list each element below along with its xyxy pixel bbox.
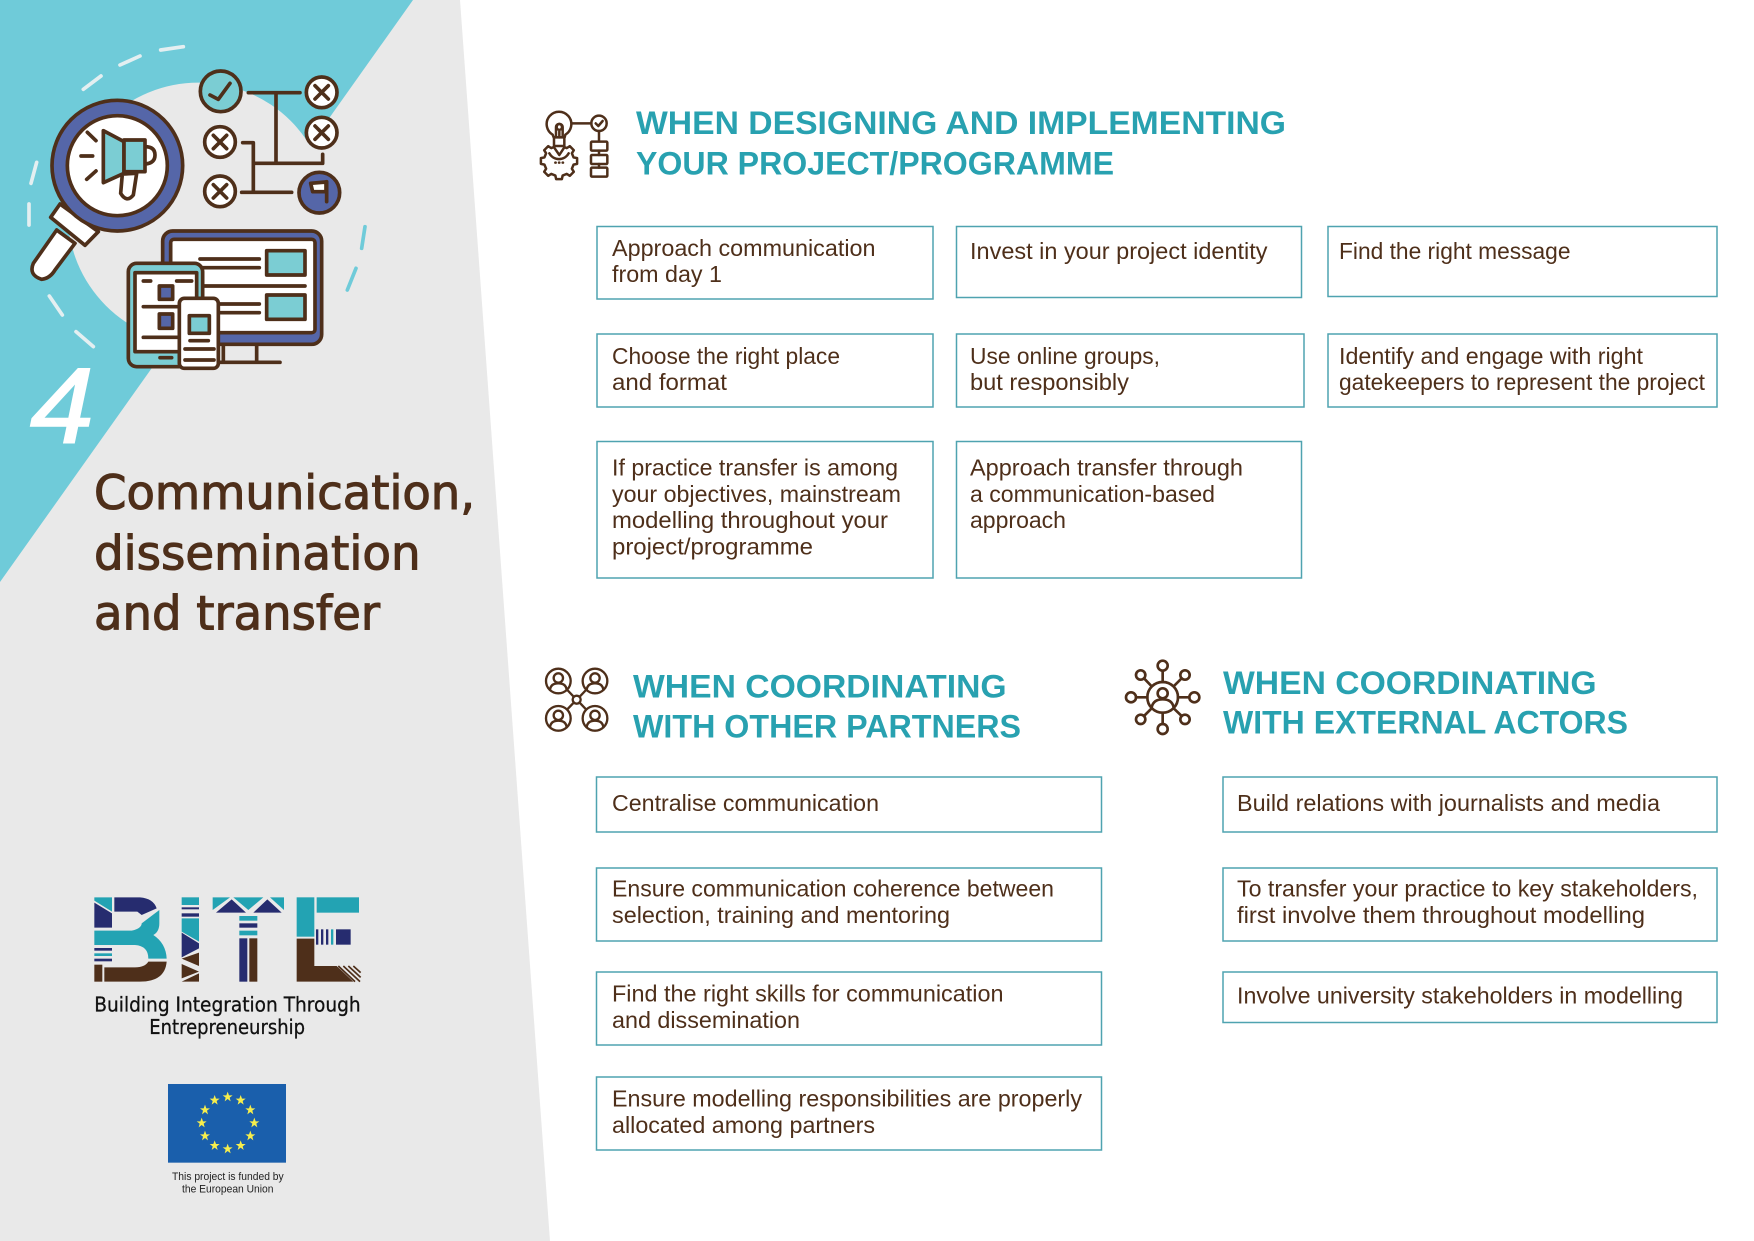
card: skills: Find the right skills for communication <box>612 980 1004 1006</box>
title: and transfer <box>94 586 381 642</box>
card: place and format: and format <box>612 369 728 395</box>
BITE tagline: Entrepreneurship <box>149 1015 305 1039</box>
card: journalists: Build relations with journalists and media <box>1237 790 1660 816</box>
card: practice transfer: project/programme <box>612 534 813 560</box>
heading: partners: WHEN COORDINATING <box>633 668 1007 704</box>
card: communication-based transfer: approach <box>970 507 1066 533</box>
card: practice transfer <box>597 442 933 578</box>
card: gatekeepers: Identify and engage with right <box>1339 343 1644 369</box>
BITE tagline <box>94 993 361 1039</box>
teal triangle <box>0 0 413 582</box>
EU funding note <box>172 1171 284 1196</box>
card: stakeholders <box>1223 868 1717 941</box>
title <box>94 466 475 642</box>
card: practice transfer: your objectives, mainstream <box>612 481 901 507</box>
card: right message: Find the right message <box>1339 238 1570 264</box>
title: Communication, <box>94 466 475 521</box>
heading: external actors: WHEN COORDINATING <box>1223 665 1597 701</box>
title: dissemination <box>94 526 421 582</box>
icon: design section <box>541 112 607 179</box>
card: responsibilities <box>596 1077 1102 1150</box>
heading: designing: WHEN DESIGNING AND IMPLEMENTING <box>636 105 1286 141</box>
card: centralise: Centralise communication <box>612 790 879 816</box>
card: stakeholders: To transfer your practice to key stakeholders, <box>1237 876 1698 902</box>
card: coherence: selection, training and mentoring <box>612 902 950 928</box>
EU funding note: This project is funded by <box>172 1171 284 1183</box>
icon: partners <box>546 669 607 731</box>
card: stakeholders: first involve them throughout modelling <box>1237 902 1645 928</box>
card: online groups: Use online groups, <box>970 343 1160 369</box>
illustration: communication icons <box>29 47 365 368</box>
heading: external actors: WITH EXTERNAL ACTORS <box>1223 704 1628 740</box>
heading: partners: WITH OTHER PARTNERS <box>633 708 1021 744</box>
card: university <box>1223 972 1717 1022</box>
card: project identity: Invest in your project identity <box>970 238 1268 264</box>
card: communication-based transfer <box>956 442 1302 578</box>
card: approach communication <box>597 226 933 299</box>
card: approach communication: from day 1 <box>612 261 722 287</box>
card: journalists <box>1223 777 1717 832</box>
card: place and format: Choose the right place <box>612 343 840 369</box>
card: university: Involve university stakeholders in modelling <box>1237 982 1683 1008</box>
left gray panel <box>0 0 550 1241</box>
card: coherence: Ensure communication coherence between <box>612 876 1054 902</box>
card: communication-based transfer: Approach transfer through <box>970 454 1243 480</box>
heading: partners <box>633 668 1021 744</box>
card: practice transfer: If practice transfer is among <box>612 454 898 480</box>
card: skills: and dissemination <box>612 1007 800 1033</box>
card: gatekeepers <box>1328 334 1717 407</box>
card: project identity <box>956 226 1302 298</box>
heading: designing: YOUR PROJECT/PROGRAMME <box>636 146 1114 182</box>
card: centralise <box>596 777 1102 832</box>
heading: designing <box>636 105 1286 182</box>
card: right message <box>1328 226 1717 296</box>
EU flag <box>168 1084 286 1163</box>
BITE logo <box>94 897 361 982</box>
card: practice transfer: modelling throughout your <box>612 507 888 533</box>
card: coherence <box>596 868 1102 941</box>
heading: external actors <box>1223 665 1628 740</box>
icon: external actors <box>1126 661 1199 734</box>
section number 4: 4 <box>30 345 94 466</box>
card: communication-based transfer: a communication-based <box>970 481 1215 507</box>
card: gatekeepers: gatekeepers to represent the project <box>1339 369 1706 395</box>
card: skills <box>596 972 1102 1045</box>
card: responsibilities: Ensure modelling responsibilities are properly <box>612 1086 1082 1112</box>
card: responsibilities: allocated among partners <box>612 1112 875 1138</box>
EU funding note: the European Union <box>182 1184 274 1196</box>
card: approach communication: Approach communication <box>612 235 876 261</box>
card: online groups: but responsibly <box>970 369 1130 395</box>
BITE tagline: Building Integration Through <box>94 993 361 1017</box>
card: place and format <box>597 334 933 407</box>
card: online groups <box>956 334 1304 407</box>
